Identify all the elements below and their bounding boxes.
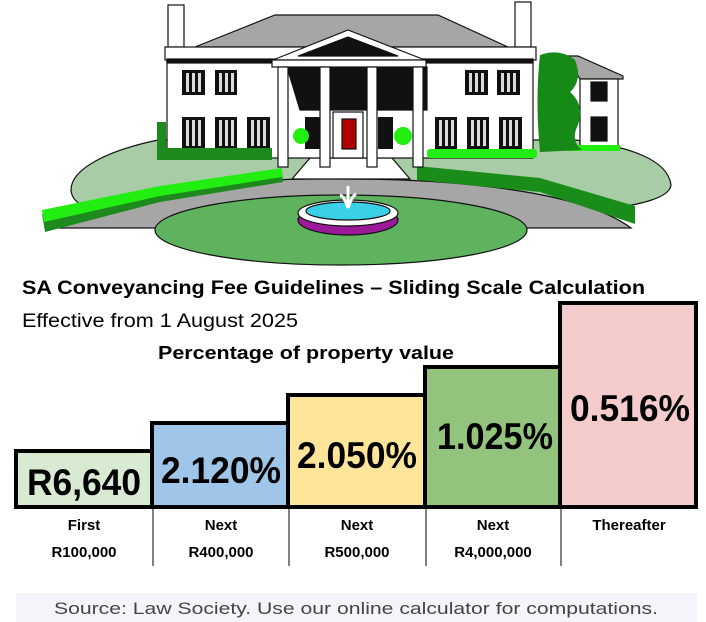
bar: thereafter: 0.516%: [570, 388, 690, 429]
door: [333, 112, 363, 158]
bar: next R4,000,000: 1.025%: [437, 416, 553, 457]
title: SA Conveyancing Fee Guidelines – Sliding Scale Calculation: [22, 278, 645, 299]
driveway: [47, 179, 631, 228]
axis labels: R500,000: [324, 544, 390, 561]
bar: next R4,000,000: [425, 367, 560, 507]
wing: [565, 56, 623, 151]
lawn: [71, 140, 671, 210]
bar: first R100,000: R6,640: [27, 462, 141, 503]
shrubs: [157, 52, 582, 160]
illustration: mansion with fountain: [42, 2, 671, 265]
bar chart: [16, 303, 696, 507]
fountain: [298, 186, 398, 235]
axis labels: Next: [341, 517, 373, 534]
columns: [278, 67, 423, 167]
axis labels: Next: [205, 517, 237, 534]
hedges front: [42, 166, 635, 232]
chart heading: Percentage of property value: [158, 343, 454, 363]
source footer: Source: Law Society. Use our online calculator for computations.: [54, 599, 658, 618]
windows: [182, 70, 522, 149]
source footer: [16, 593, 697, 622]
bar: next R400,000: 2.120%: [161, 450, 281, 491]
axis labels: [51, 517, 666, 561]
walk: [292, 158, 410, 179]
axis labels: R4,000,000: [454, 544, 532, 561]
bar: next R400,000: [152, 423, 288, 507]
bar: first R100,000: [16, 451, 152, 507]
bar: next R500,000: [288, 395, 425, 507]
axis labels: R100,000: [51, 544, 117, 561]
main body: [167, 60, 533, 158]
bar: next R500,000: 2.050%: [297, 435, 417, 476]
subtitle: Effective from 1 August 2025: [22, 311, 298, 332]
axis labels: R400,000: [188, 544, 254, 561]
roof: [195, 15, 508, 47]
bar: thereafter: [560, 303, 696, 507]
portico: [272, 30, 427, 110]
chimneys: [168, 2, 531, 47]
center green oval: [155, 195, 527, 265]
axis labels: Next: [477, 517, 509, 534]
axis labels: Thereafter: [592, 517, 666, 534]
axis labels: First: [68, 517, 100, 534]
